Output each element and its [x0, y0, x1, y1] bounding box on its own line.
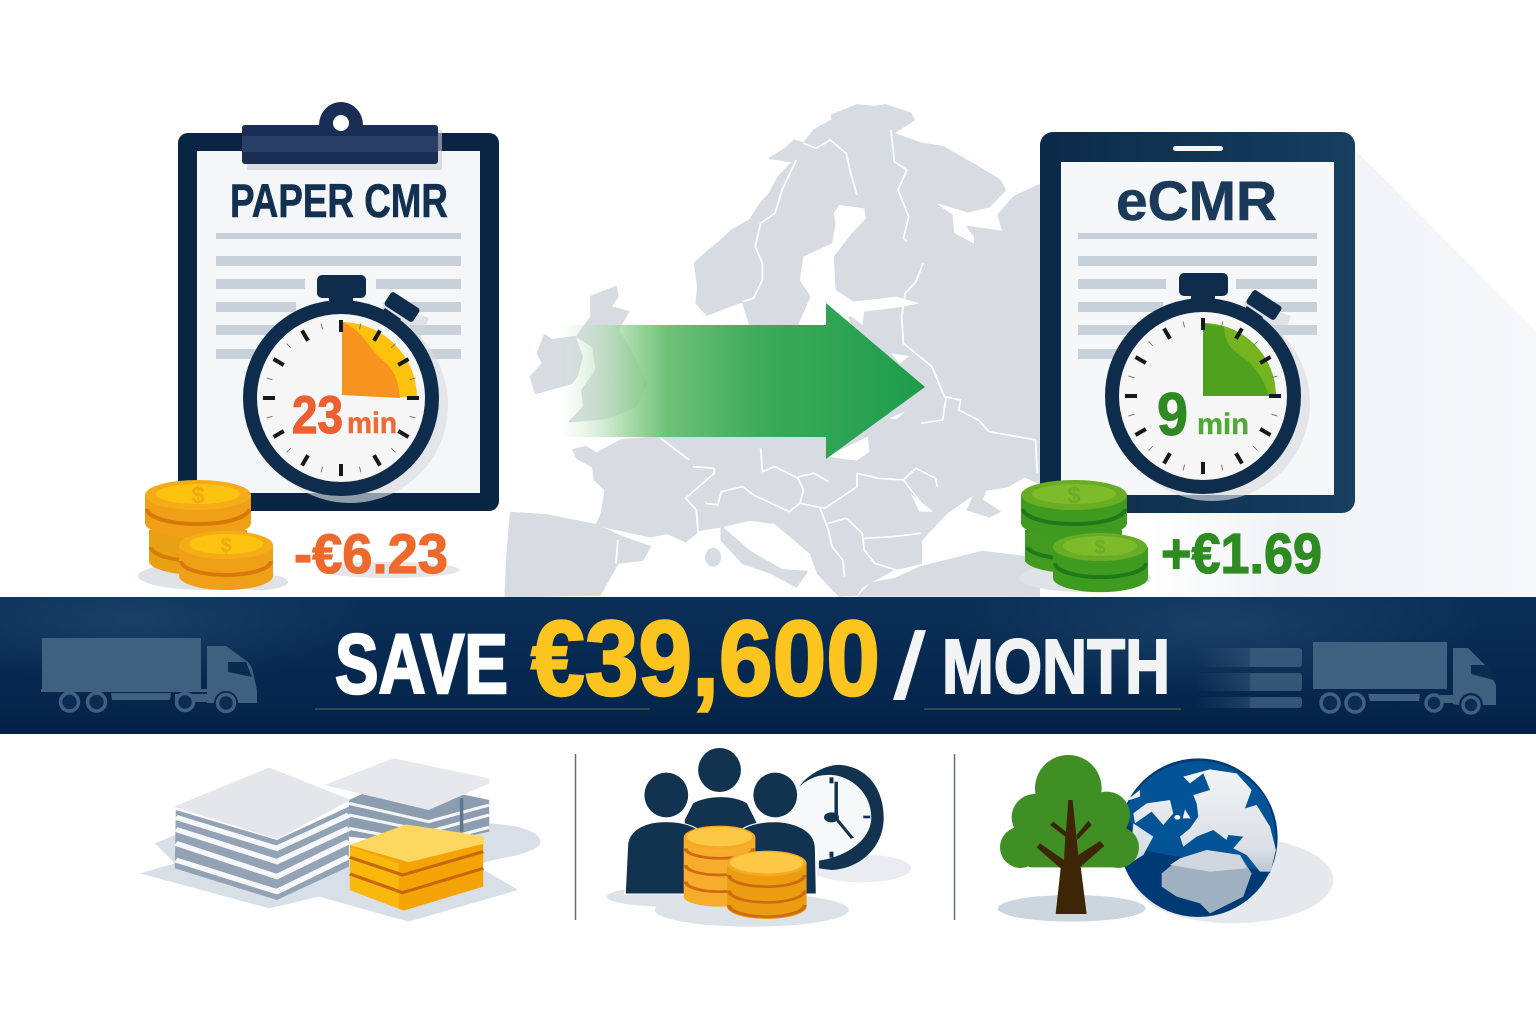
- panel: paper CMR: [138, 102, 499, 590]
- headline: amount: €39,600: [531, 598, 880, 718]
- heading: eCMR: eCMR: [1116, 169, 1277, 232]
- time label: 23: [292, 386, 343, 445]
- headline: save: SAVE: [335, 617, 508, 711]
- icon: green coins: $: [1067, 482, 1081, 509]
- small gulfs: [889, 353, 909, 419]
- headline: slash: [893, 630, 926, 700]
- globe: [1119, 758, 1278, 917]
- Baltic sea and Gulf of Bothnia: [798, 205, 919, 330]
- Corsica: [706, 549, 720, 566]
- divider left: [574, 754, 576, 920]
- icon: team, clock and coins: [607, 748, 911, 927]
- gold blocks: [350, 825, 483, 911]
- people: [625, 748, 817, 894]
- time label: 9: [1157, 381, 1188, 448]
- paper stack front: [175, 768, 349, 900]
- icon: gold coins: $: [220, 535, 232, 557]
- arrow: [557, 303, 925, 459]
- icon: truck right with speed lines: [1196, 642, 1496, 713]
- icon: truck left: [41, 638, 257, 712]
- map of Europe: [505, 105, 1039, 597]
- panel: eCMR: [1019, 132, 1355, 592]
- elapsed sector: [342, 322, 417, 398]
- icon: tree and globe: [998, 755, 1333, 923]
- headline: month: MONTH: [942, 624, 1170, 710]
- divider right: [954, 754, 956, 920]
- shadows: [140, 823, 540, 922]
- tablet cast shadow: [1150, 150, 1536, 597]
- clipboard: [178, 102, 499, 511]
- tablet: [1040, 132, 1355, 513]
- Greece: [811, 553, 868, 596]
- unit label: min: [1197, 408, 1249, 441]
- map borders: [616, 130, 1037, 577]
- clock: [776, 765, 884, 870]
- icon: gold coins: [138, 480, 288, 590]
- shadows: [998, 837, 1333, 923]
- paper stack back: [324, 758, 489, 845]
- document lines: [216, 233, 461, 359]
- banner: [0, 597, 1536, 734]
- cost label: -€6.23: [294, 522, 448, 585]
- shadows: [607, 854, 911, 927]
- headline underlines: [315, 708, 1181, 710]
- Great Britain: [570, 287, 646, 422]
- icon: green coins: $: [1094, 537, 1106, 559]
- stopwatch: 9 min: [1112, 273, 1310, 501]
- Italy: [721, 527, 807, 587]
- southern Baltic coast: [827, 437, 869, 461]
- icon: green coins: [1019, 480, 1151, 592]
- heading: paper CMR: PAPER CMR: [230, 174, 448, 227]
- elapsed sector: [1203, 323, 1276, 396]
- stopwatch: 23 min: [250, 275, 448, 503]
- Ireland: [530, 335, 582, 393]
- tree: [1000, 755, 1139, 914]
- Turkey: [859, 552, 1039, 596]
- lake detail: [911, 493, 930, 512]
- unit label: min: [347, 407, 397, 440]
- icon: paper stacks with gold: [140, 758, 540, 922]
- coins: [684, 826, 807, 919]
- icon: gold coins: $: [191, 482, 205, 509]
- Spain and Portugal: [505, 513, 650, 597]
- cost shadow: [320, 562, 460, 578]
- saving label: +€1.69: [1161, 522, 1322, 586]
- document lines: [1078, 233, 1317, 359]
